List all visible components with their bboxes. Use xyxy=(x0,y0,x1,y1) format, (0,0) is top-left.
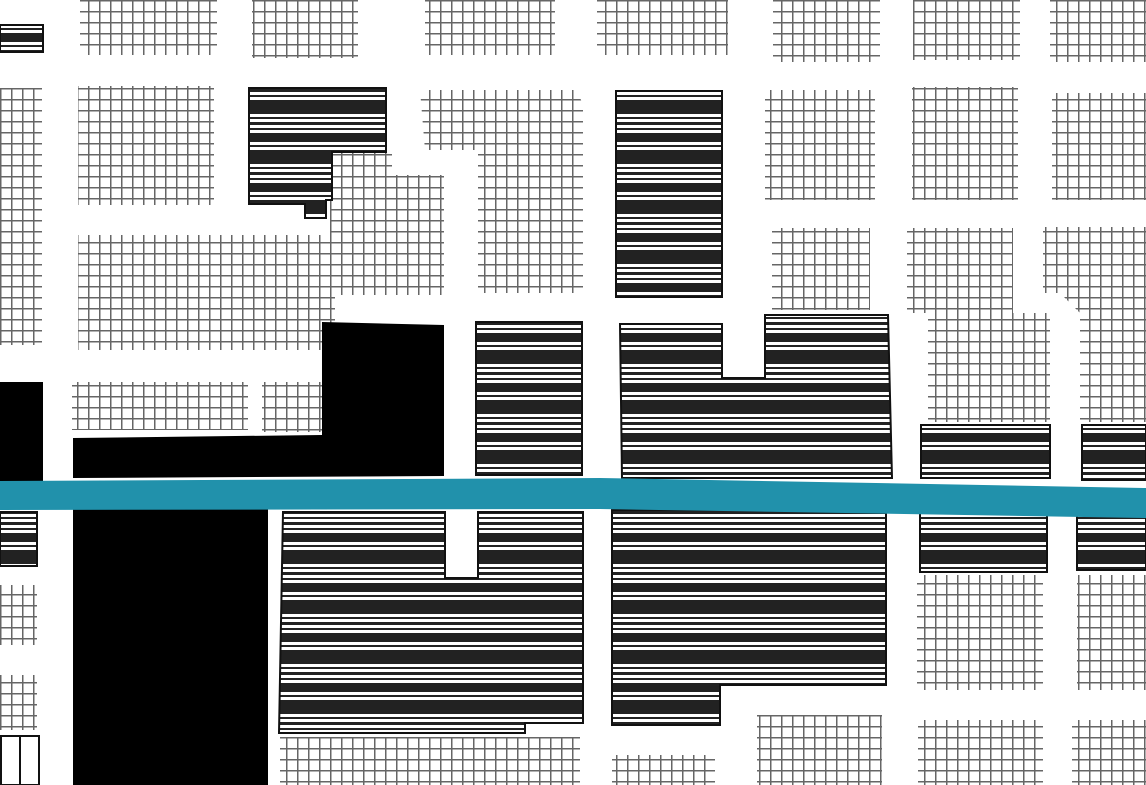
black blocks xyxy=(0,322,444,785)
river xyxy=(0,478,1146,518)
small outlined box xyxy=(1,736,39,785)
